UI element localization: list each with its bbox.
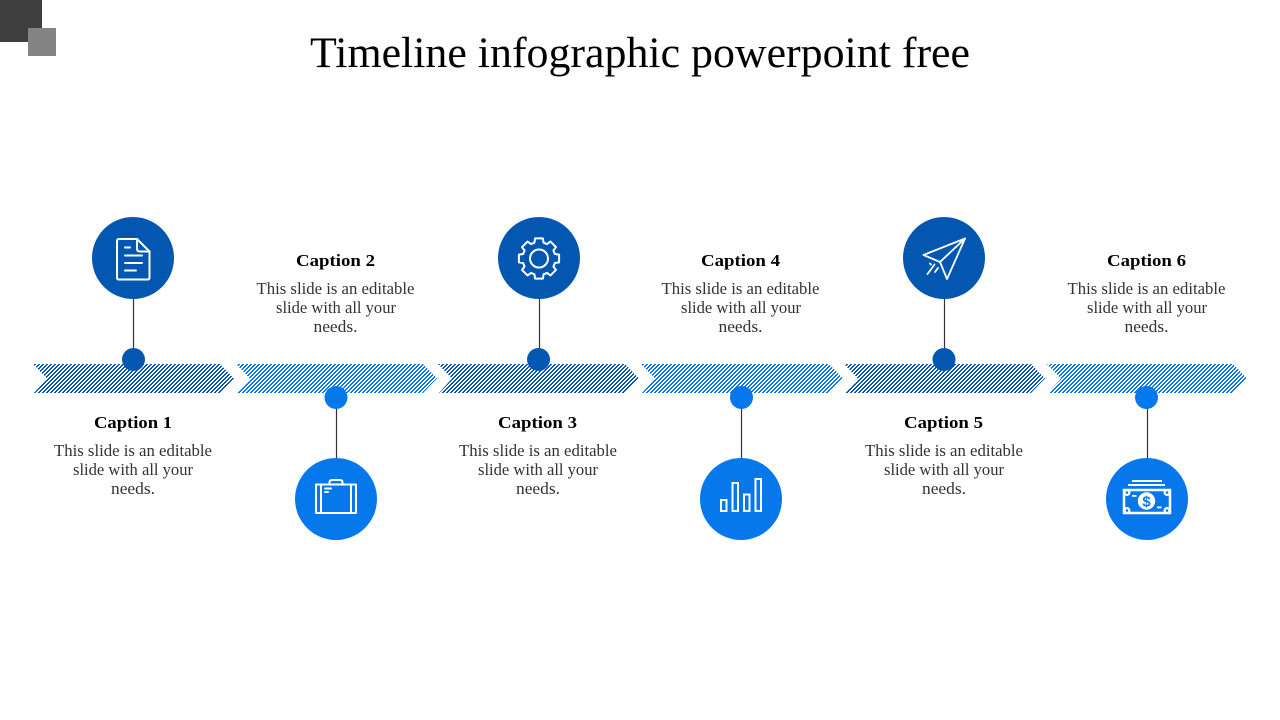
step 6 text [1068,251,1226,336]
step 4 text: slide with all your [681,298,802,317]
chevron 5 [844,364,1045,393]
step 5 text: slide with all your [884,460,1005,479]
step 5 marker [903,217,985,371]
step 2 text: slide with all your [276,298,397,317]
step 6 text: needs. [1124,317,1168,336]
step 2 text [256,251,414,336]
step 5 text [865,413,1023,498]
timeline chevron band [33,364,1247,393]
icon: gear [519,238,559,279]
decorative corner squares [0,0,56,56]
step 3 text: Caption 3 [498,413,577,432]
step 3 marker [498,217,580,371]
step 5 text: This slide is an editable [865,441,1023,460]
step 2 text: This slide is an editable [256,279,414,298]
icon: banknote [1124,480,1170,514]
step 3 text: slide with all your [478,460,599,479]
icon: paper plane [924,238,965,279]
step 4 text [662,251,820,336]
step 1 marker [92,217,174,371]
step 1 text: needs. [111,479,155,498]
step 6 text: slide with all your [1087,298,1208,317]
step 1 text: slide with all your [73,460,194,479]
chevron 2 [236,364,437,393]
icon: document [117,239,150,280]
step 3 text: This slide is an editable [459,441,617,460]
step 3 text: needs. [516,479,560,498]
step 3 text [459,413,617,498]
step 4 text: Caption 4 [701,251,780,270]
step 4 text: needs. [718,317,762,336]
chevron 4 [641,364,843,393]
step 4 marker [700,386,782,540]
step 2 text: needs. [314,317,358,336]
icon: banknote: $ [1142,494,1151,510]
step 6 marker [1106,386,1188,540]
step 5 text: needs. [922,479,966,498]
step 1 text: Caption 1 [94,413,172,432]
step 5 text: Caption 5 [904,413,983,432]
step 1 text: This slide is an editable [54,441,212,460]
step 6 text: Caption 6 [1107,251,1186,270]
chevron 6 [1047,364,1247,393]
icon: briefcase [316,480,356,513]
step 2 text: Caption 2 [296,251,375,270]
icon: bar chart [721,479,761,511]
step 4 text: This slide is an editable [662,279,820,298]
step 1 text [54,413,212,498]
step 6 text: This slide is an editable [1068,279,1226,298]
chevron 1 [33,364,234,393]
chevron 3 [438,364,639,393]
title: Timeline infographic powerpoint free [310,30,970,77]
step 2 marker [295,386,377,540]
